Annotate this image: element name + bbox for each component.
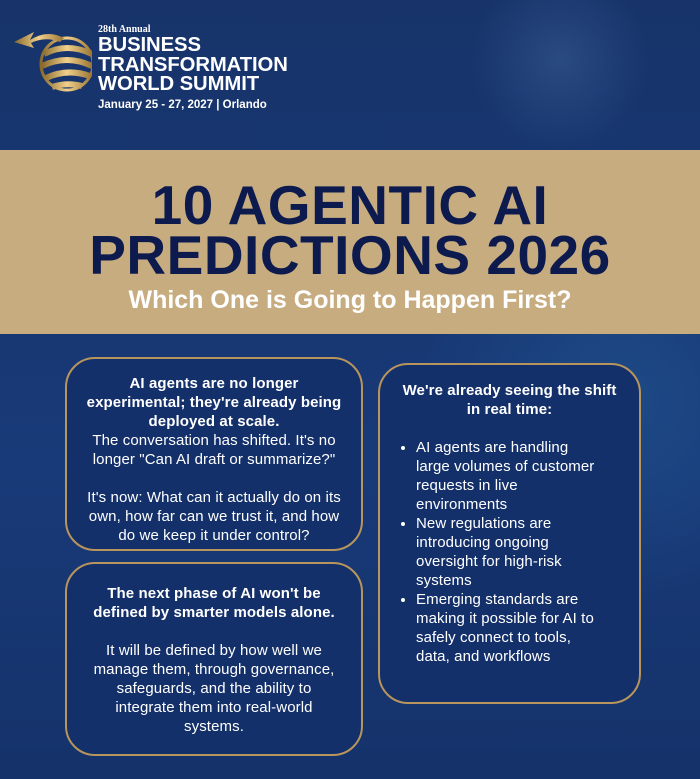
panel: shift in real time: New regulations are introducing ongoing oversight for high-risk systems <box>416 515 562 589</box>
logo text <box>98 24 288 110</box>
panel: next phase <box>65 562 363 756</box>
panel: intro: The conversation has shifted. It's no longer "Can AI draft or summarize?" <box>92 432 336 468</box>
panel: shift in real time <box>378 363 641 704</box>
logo text: BUSINESS <box>98 34 201 56</box>
logo text: TRANSFORMATION <box>98 54 288 76</box>
title: PREDICTIONS 2026 <box>89 224 611 286</box>
title <box>89 174 611 286</box>
panel: shift in real time: We're already seeing the shift in real time: <box>403 382 616 418</box>
logo text: WORLD SUMMIT <box>98 73 259 95</box>
panel: shift in real time: AI agents are handling large volumes of customer requests in live environments <box>416 439 594 513</box>
panel: intro <box>65 357 363 551</box>
logo text: January 25 - 27, 2027 | Orlando <box>98 98 267 110</box>
panel: next phase: The next phase of AI won't be defined by smarter models alone. <box>93 585 335 621</box>
title: 10 AGENTIC AI <box>152 174 548 236</box>
panel: intro: AI agents are no longer experimental; they're already being deployed at scale. <box>87 375 341 430</box>
logo icon: gold globe <box>14 32 92 92</box>
panel: shift in real time: Emerging standards are making it possible for AI to safely connect to tools, data, and workflows <box>416 591 594 665</box>
panel: intro: It's now: What can it actually do on its own, how far can we trust it, and how do we keep it under control? <box>87 489 341 544</box>
panel: next phase: It will be defined by how well we manage them, through governance, safeguards, and the ability to integrate them into real-world systems. <box>94 642 334 735</box>
title band <box>0 150 700 334</box>
logo text: 28th Annual <box>98 24 151 35</box>
subtitle: Which One is Going to Happen First? <box>128 286 572 314</box>
